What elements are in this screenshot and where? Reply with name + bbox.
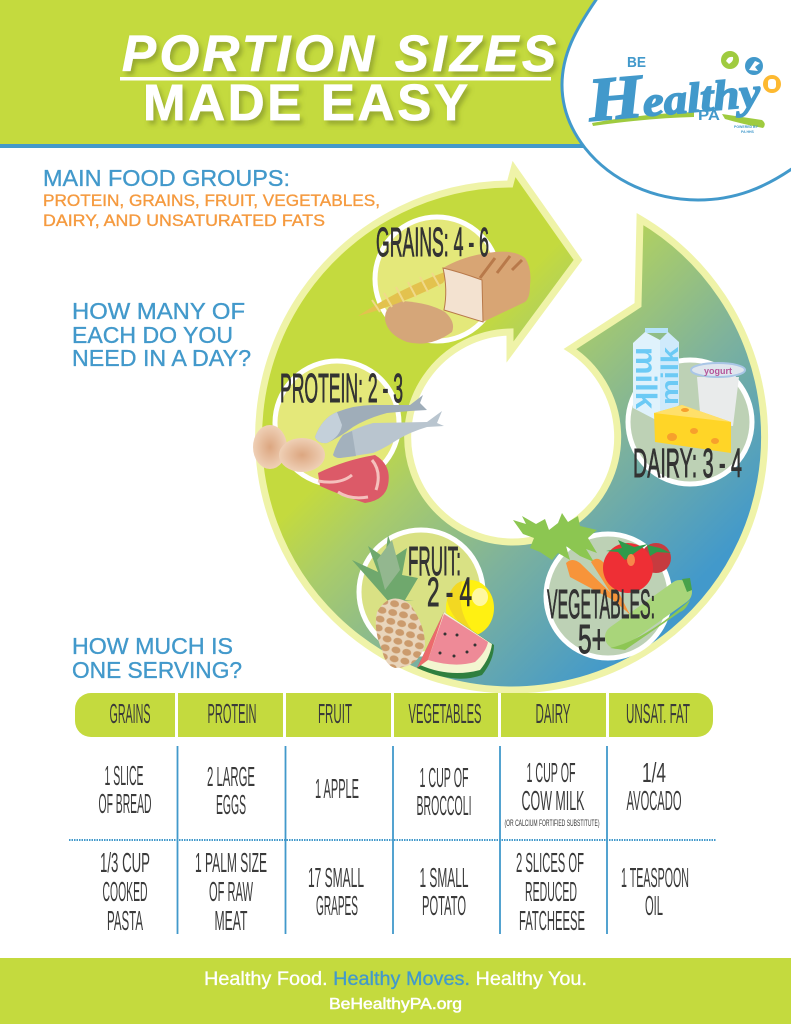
table body: 1/3 CUP bbox=[100, 847, 150, 878]
icon: yogurt bbox=[691, 363, 745, 426]
table header: UNSAT. FAT bbox=[626, 698, 690, 729]
table body: AVOCADO bbox=[626, 785, 682, 816]
header band bbox=[0, 0, 791, 148]
table body: COW MILK bbox=[522, 785, 585, 816]
heading: main food groups: DAIRY, AND UNSATURATED FATS bbox=[43, 211, 325, 230]
logo: Be Healthy PA: Healthy bbox=[584, 52, 763, 135]
table header: FRUIT bbox=[318, 698, 352, 729]
icon: milk carton: milk bbox=[657, 346, 684, 405]
table header: PROTEIN bbox=[208, 698, 256, 729]
label: fruit: FRUIT: bbox=[408, 538, 461, 584]
table body: 1 APPLE bbox=[315, 773, 359, 804]
table header bbox=[75, 693, 713, 737]
title bbox=[120, 25, 556, 131]
table body: (OR CALCIUM FORTIFIED SUBSTITUTE) bbox=[504, 818, 600, 828]
icon: fish bbox=[315, 395, 444, 458]
table body: FATCHEESE bbox=[519, 905, 585, 936]
circular arrow bbox=[259, 169, 765, 690]
table body: OF BREAD bbox=[98, 788, 152, 819]
circle: dairy bbox=[628, 328, 752, 486]
question: how many bbox=[72, 298, 251, 371]
label: fruit bbox=[408, 538, 472, 615]
icon: carrot greens bbox=[513, 513, 597, 562]
icon: wheat bbox=[358, 270, 495, 316]
question: how much: ONE SERVING? bbox=[72, 657, 242, 683]
question: how much: HOW MUCH IS bbox=[72, 633, 233, 659]
table body: 1/4 bbox=[642, 757, 666, 788]
table body: 17 SMALL bbox=[308, 862, 364, 893]
icon: carrots bbox=[566, 559, 632, 616]
question: how many: NEED IN A DAY? bbox=[72, 345, 251, 371]
table body: OF RAW bbox=[209, 876, 253, 907]
heading: main food groups: PROTEIN, GRAINS, FRUIT, VEGETABLES, bbox=[43, 191, 380, 210]
table body: BROCCOLI bbox=[416, 790, 472, 821]
heading: main food groups: MAIN FOOD GROUPS: bbox=[43, 165, 290, 191]
circle: grains bbox=[358, 217, 530, 344]
icon: bread loaf bbox=[443, 252, 530, 322]
icon: watermelon bbox=[417, 612, 494, 679]
icon: meat bbox=[318, 455, 389, 503]
table body bbox=[69, 746, 716, 936]
logo: Be Healthy PA: BE bbox=[627, 54, 646, 71]
circle: vegetables bbox=[513, 513, 692, 662]
table header: VEGETABLES bbox=[408, 698, 482, 729]
icon: milk carton bbox=[629, 328, 684, 422]
title: MADE EASY bbox=[143, 74, 468, 131]
label: vegetables: 5+ bbox=[578, 616, 606, 662]
label: fruit: 2 - 4 bbox=[427, 569, 472, 615]
logo: Be Healthy PA: POWERED BY bbox=[734, 125, 759, 129]
question: how many: EACH DO YOU bbox=[72, 322, 233, 348]
table body: 1 SLICE bbox=[104, 760, 144, 791]
table body: GRAPES bbox=[316, 890, 358, 921]
footer: BeHealthyPA.org bbox=[329, 996, 462, 1013]
table header: GRAINS bbox=[110, 698, 150, 729]
icon: zucchini bbox=[610, 578, 692, 650]
label: vegetables bbox=[547, 581, 655, 662]
circle: protein bbox=[253, 361, 444, 503]
icon: yogurt: yogurt bbox=[704, 366, 732, 376]
logo: Be Healthy PA: PA HHS bbox=[741, 130, 754, 134]
table body: 2 SLICES OF bbox=[516, 847, 584, 878]
icon: tomatoes bbox=[603, 540, 671, 593]
footer bbox=[0, 958, 791, 1024]
icon: pineapple bbox=[352, 535, 425, 668]
table body: PASTA bbox=[107, 905, 143, 936]
icon: lemon bbox=[446, 580, 494, 636]
table body: 2 LARGE bbox=[207, 761, 255, 792]
table body: POTATO bbox=[422, 890, 466, 921]
question: how much bbox=[72, 633, 242, 683]
table body: 1 PALM SIZE bbox=[195, 847, 267, 878]
icon: milk carton: milk bbox=[629, 347, 662, 409]
table header: DAIRY bbox=[536, 698, 571, 729]
heading: main food groups bbox=[43, 165, 380, 230]
table body: 1 CUP OF bbox=[420, 762, 468, 793]
table body: MEAT bbox=[214, 905, 248, 936]
circle: fruit bbox=[352, 530, 494, 679]
logo: Be Healthy PA: PA bbox=[698, 107, 720, 124]
title: PORTION SIZES bbox=[122, 25, 556, 82]
icon: cheese bbox=[654, 405, 731, 453]
table body: 1 CUP OF bbox=[526, 757, 576, 788]
table body: REDUCED bbox=[525, 876, 577, 907]
icon: eggs bbox=[253, 425, 325, 472]
question: how many: HOW MANY OF bbox=[72, 298, 245, 324]
footer: Healthy Food. Healthy Moves. Healthy You. bbox=[204, 969, 587, 990]
circle: grains: GRAINS: 4 - 6 bbox=[376, 219, 489, 265]
logo circle bbox=[562, 0, 791, 200]
table body: COOKED bbox=[102, 876, 148, 907]
table body: 1 SMALL bbox=[420, 862, 468, 893]
table body: OIL bbox=[645, 890, 663, 921]
circle: protein: PROTEIN: 2 - 3 bbox=[280, 365, 403, 411]
icon: bread roll bbox=[385, 301, 453, 344]
table body: EGGS bbox=[216, 789, 246, 820]
